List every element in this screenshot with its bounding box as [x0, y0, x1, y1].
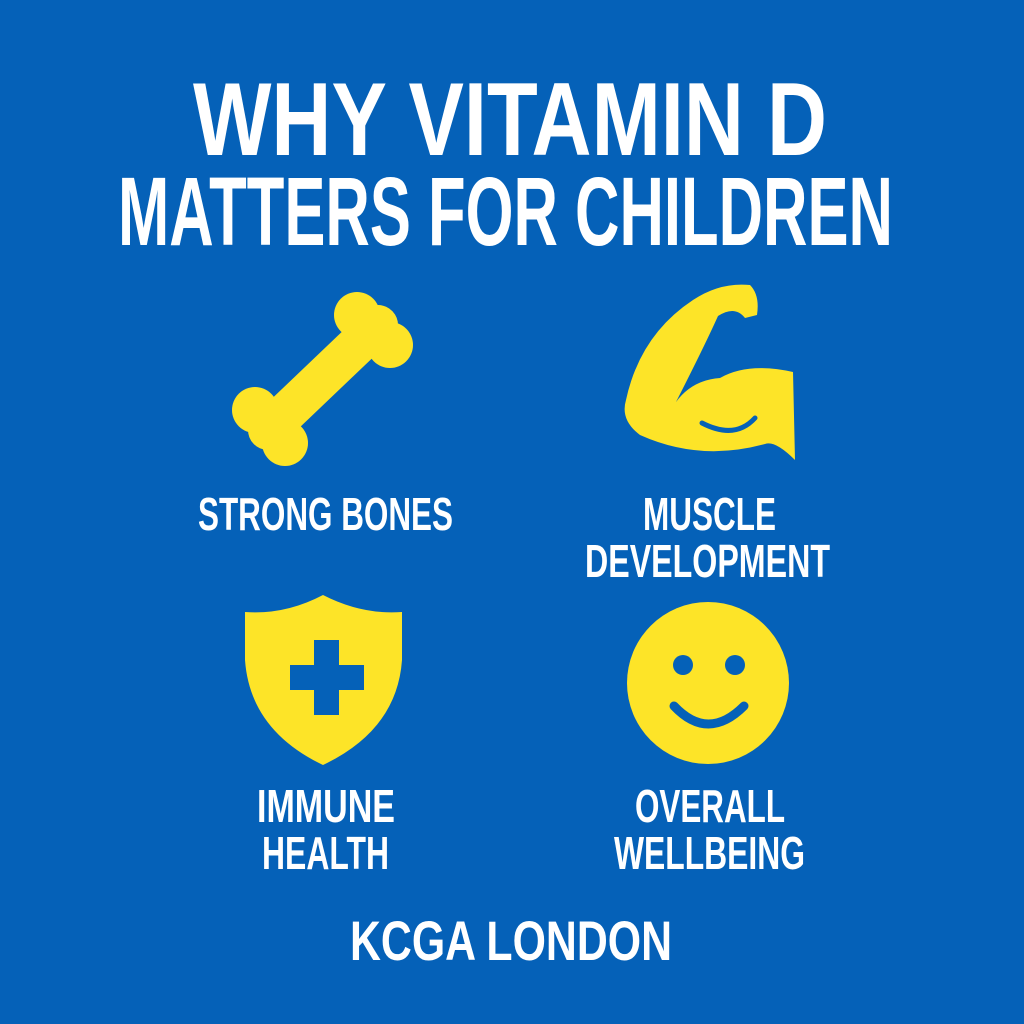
icon: smiley — [627, 602, 789, 764]
label: muscle development — [585, 488, 830, 587]
title: WHY VITAMIN D — [193, 62, 827, 178]
label: overall wellbeing: WELLBEING — [614, 827, 805, 879]
title — [118, 62, 893, 266]
footer: KCGA London: KCGA LONDON — [350, 909, 672, 972]
label: immune health: IMMUNE — [257, 780, 395, 832]
label: muscle development: DEVELOPMENT — [585, 535, 830, 587]
label: strong bones: STRONG BONES — [198, 488, 453, 540]
icon: bone — [232, 292, 413, 466]
icon: flexed arm — [625, 285, 795, 460]
label: muscle development: MUSCLE — [643, 488, 776, 540]
label: immune health: HEALTH — [262, 827, 389, 879]
label: immune health — [257, 780, 395, 879]
label: overall wellbeing: OVERALL — [635, 780, 785, 832]
label: overall wellbeing — [614, 780, 805, 879]
icon: shield with cross — [245, 595, 402, 765]
